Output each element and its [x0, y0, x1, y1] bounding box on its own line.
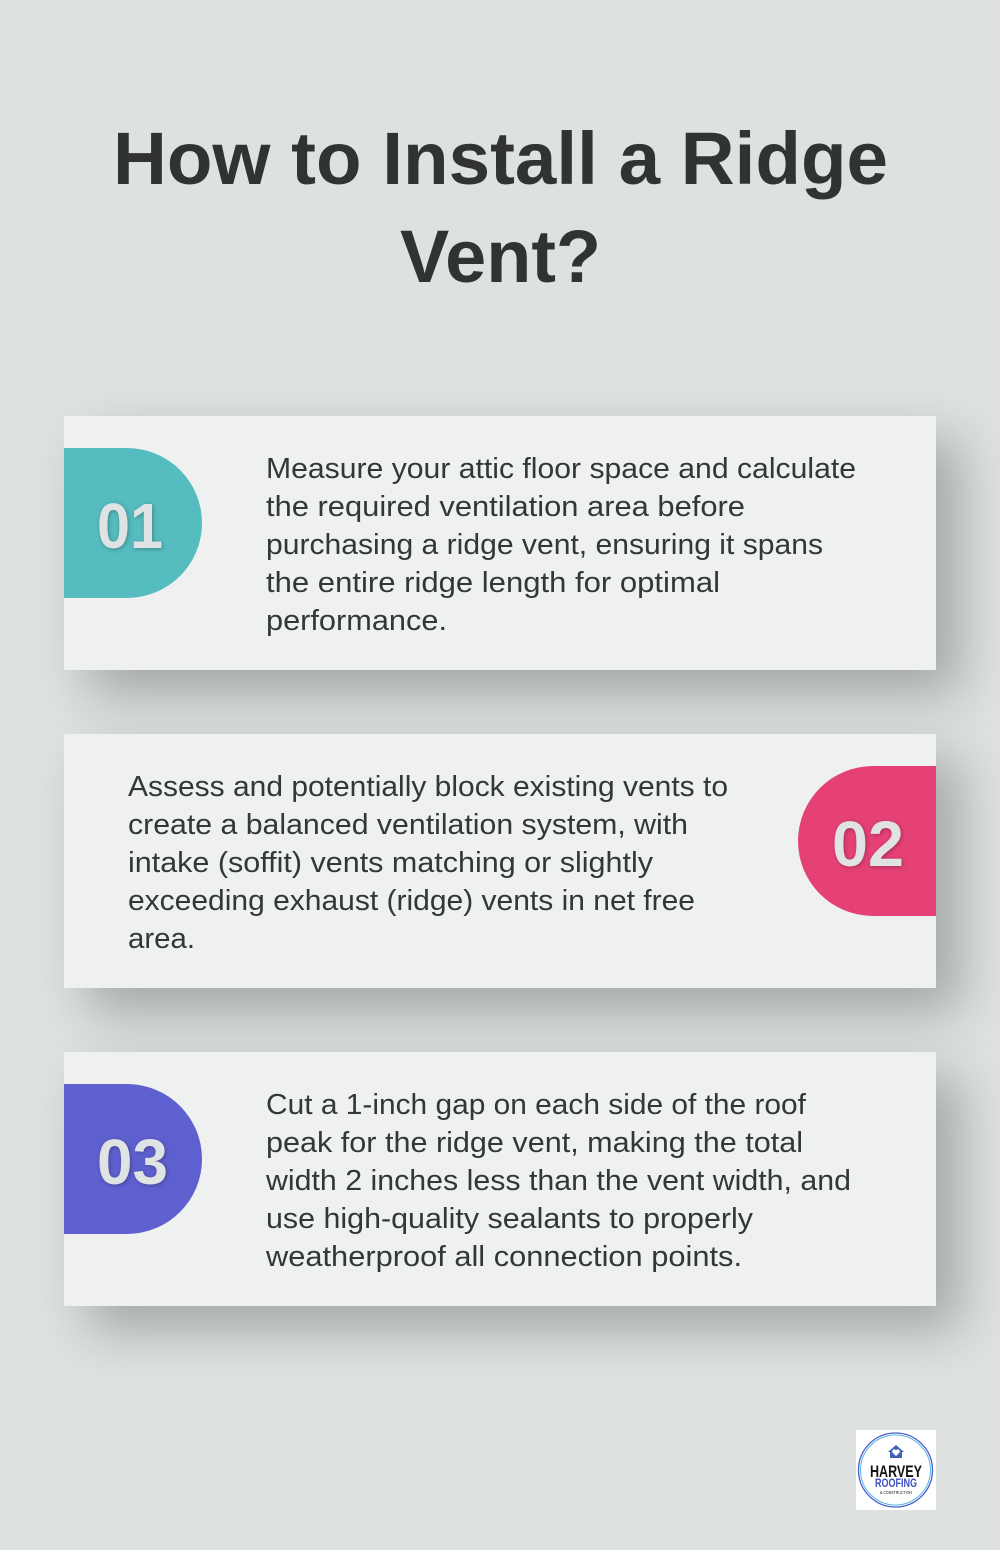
panel: step 2	[64, 734, 936, 988]
text: step 3 description: weatherproof all connection points.	[265, 1241, 742, 1273]
badge: 02	[798, 766, 936, 916]
text: step 3 description	[265, 1089, 851, 1273]
text: step 3 description: use high-quality sealants to properly	[266, 1203, 754, 1235]
text: step 1 description: performance.	[266, 605, 447, 637]
badge: 03	[64, 1084, 202, 1234]
title: How to Install a Ridge	[113, 117, 888, 200]
logo: Harvey Roofing & Construction: ROOFING	[875, 1476, 917, 1490]
panel: step 3	[64, 1052, 936, 1306]
title	[113, 117, 888, 298]
text: step 2 description: exceeding exhaust (ridge) vents in net free	[128, 885, 695, 917]
title: Vent?	[400, 215, 601, 298]
panel: step 1	[64, 416, 936, 670]
logo: Harvey Roofing & Construction: & CONSTRUCTION	[880, 1490, 912, 1495]
text: step 1 description: Measure your attic floor space and calculate	[266, 453, 856, 485]
text: step 1 description: the entire ridge length for optimal	[266, 567, 720, 599]
text: step 1 description: the required ventilation area before	[266, 491, 745, 523]
badge: 01	[64, 448, 202, 598]
text: step 3 description: peak for the ridge vent, making the total	[266, 1127, 803, 1159]
number: 03: 03	[97, 1126, 168, 1198]
text: step 3 description: Cut a 1-inch gap on each side of the roof	[266, 1089, 807, 1121]
text: step 2 description: intake (soffit) vents matching or slightly	[128, 847, 654, 879]
text: step 3 description: width 2 inches less than the vent width, and	[265, 1165, 851, 1197]
text: step 2 description	[128, 771, 728, 955]
text: step 1 description	[266, 453, 856, 637]
number: 01: 01	[97, 490, 163, 562]
text: step 1 description: purchasing a ridge vent, ensuring it spans	[266, 529, 823, 561]
text: step 2 description: create a balanced ventilation system, with	[128, 809, 688, 841]
logo: Harvey Roofing & Construction: HARVEY	[870, 1462, 922, 1481]
logo: Harvey Roofing & Construction	[856, 1430, 936, 1510]
text: step 2 description: area.	[128, 923, 195, 955]
number: 02: 02	[832, 808, 904, 880]
text: step 2 description: Assess and potentially block existing vents to	[128, 771, 728, 803]
